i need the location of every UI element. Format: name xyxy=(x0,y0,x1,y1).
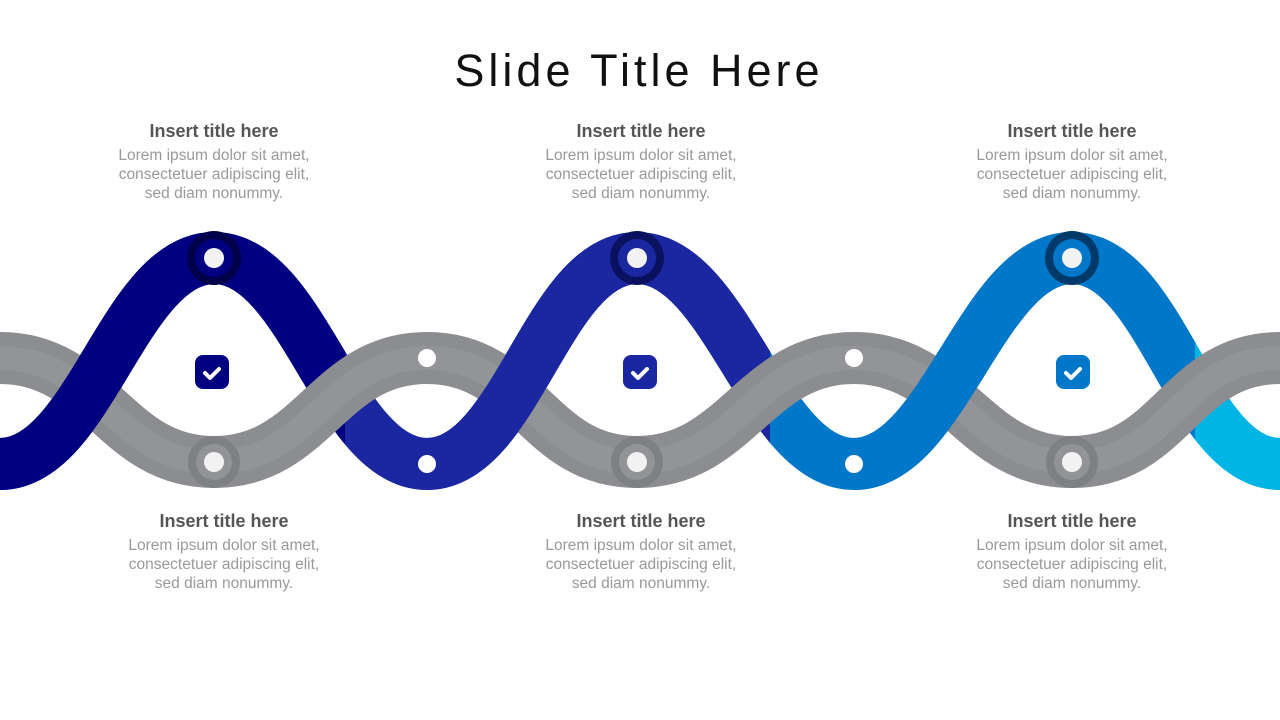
diagram: wave xyxy=(0,231,1280,490)
text: top 2: sed diam nonummy. xyxy=(572,185,710,202)
text: top 2: Insert title here xyxy=(576,121,706,141)
text: top 2: Lorem ipsum dolor sit amet, xyxy=(545,147,737,164)
text: top 1: consectetuer adipiscing elit, xyxy=(119,166,309,183)
text: top 3: sed diam nonummy. xyxy=(1003,185,1141,202)
text: bottom 3 xyxy=(976,511,1168,592)
text: bottom 2: Lorem ipsum dolor sit amet, xyxy=(545,537,737,554)
text: bottom 1 xyxy=(128,511,320,592)
text: bottom 1: sed diam nonummy. xyxy=(155,575,293,592)
icon: checkboxes xyxy=(195,355,1090,389)
text: bottom 3: Lorem ipsum dolor sit amet, xyxy=(976,537,1168,554)
text: bottom 3: sed diam nonummy. xyxy=(1003,575,1141,592)
title: Slide Title Here xyxy=(454,45,824,96)
text: bottom 2: consectetuer adipiscing elit, xyxy=(546,556,736,573)
text: bottom 3: Insert title here xyxy=(1007,511,1137,531)
trough markers xyxy=(188,349,1098,488)
text: top 3 xyxy=(976,121,1168,202)
text: top 3: Insert title here xyxy=(1007,121,1137,141)
text: bottom 1: consectetuer adipiscing elit, xyxy=(129,556,319,573)
text: bottom 1: Lorem ipsum dolor sit amet, xyxy=(128,537,320,554)
text: top 1: Lorem ipsum dolor sit amet, xyxy=(118,147,310,164)
text: top 3: consectetuer adipiscing elit, xyxy=(977,166,1167,183)
text: bottom 1: Insert title here xyxy=(159,511,289,531)
colored upstrokes on top xyxy=(0,258,214,464)
text: bottom 2: Insert title here xyxy=(576,511,706,531)
text: bottom 3: consectetuer adipiscing elit, xyxy=(977,556,1167,573)
text: bottom 2: sed diam nonummy. xyxy=(572,575,710,592)
text: top 1: Insert title here xyxy=(149,121,279,141)
text: top 3: Lorem ipsum dolor sit amet, xyxy=(976,147,1168,164)
peak markers xyxy=(187,231,1099,285)
text: top 1: sed diam nonummy. xyxy=(145,185,283,202)
text: bottom 2 xyxy=(545,511,737,592)
text: top 2 xyxy=(545,121,737,202)
text: top 1 xyxy=(118,121,310,202)
gray wave xyxy=(0,358,1280,462)
text: top 2: consectetuer adipiscing elit, xyxy=(546,166,736,183)
